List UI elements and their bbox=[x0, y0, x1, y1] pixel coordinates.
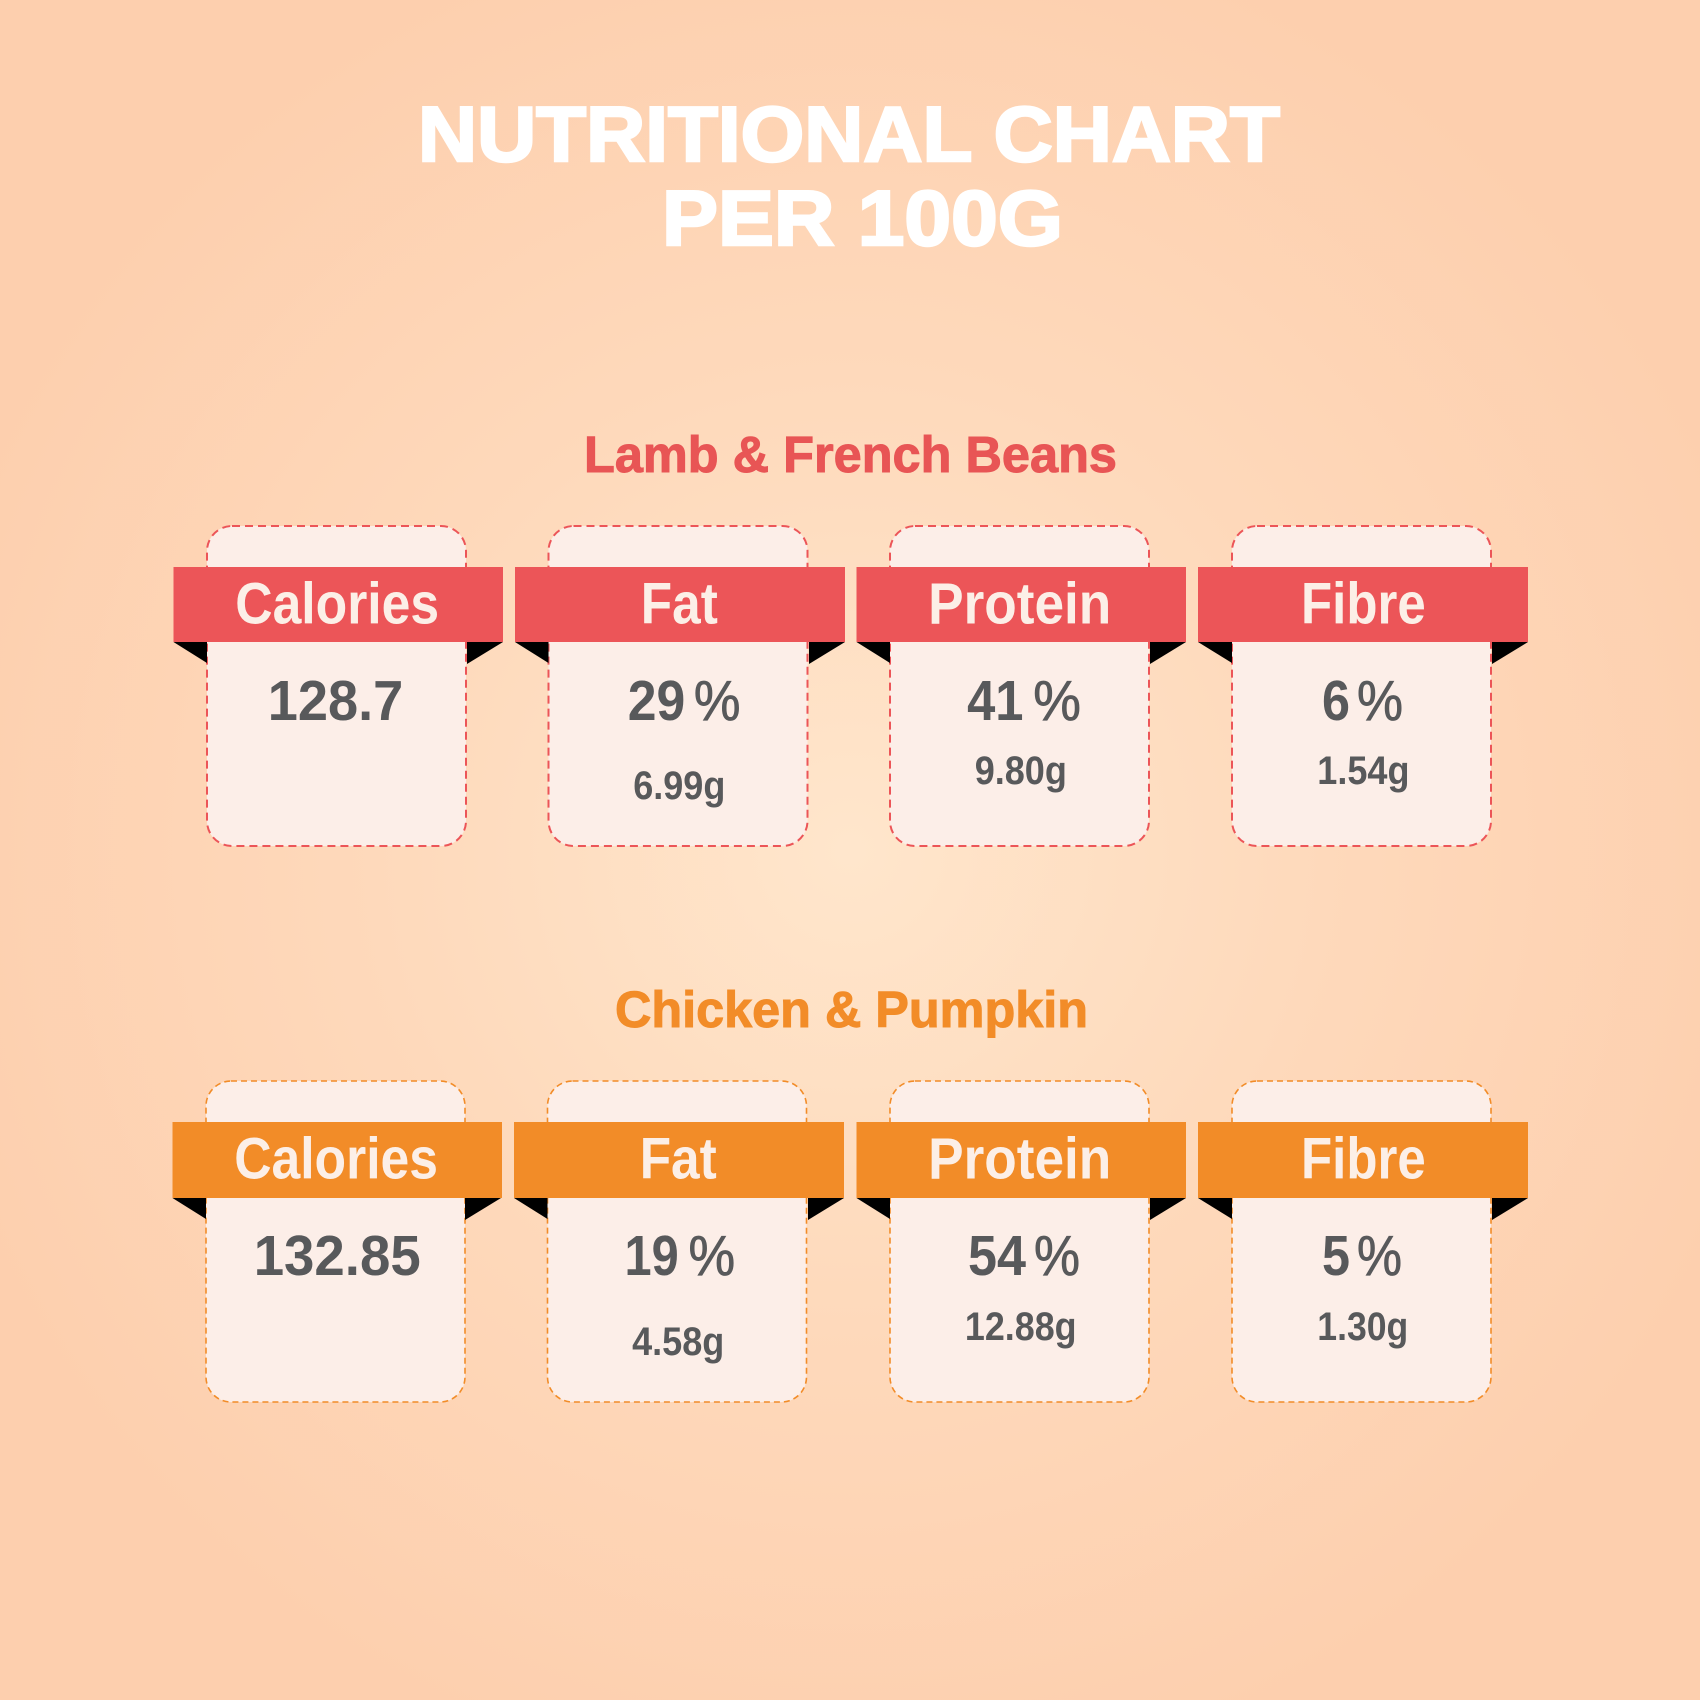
panel: Chicken Fibre bbox=[1198, 1081, 1528, 1402]
panel: Lamb Fibre bbox=[1198, 526, 1528, 846]
panel: Chicken Fat: Fat bbox=[640, 1126, 717, 1192]
panel: Chicken Calories bbox=[172, 1081, 502, 1402]
heading: Lamb & French Beans: Lamb & French Beans bbox=[584, 426, 1117, 483]
panel: Lamb Fat: Fat bbox=[641, 571, 718, 636]
panel: Chicken Fat: 4.58g bbox=[632, 1320, 724, 1364]
panel: Lamb Protein: Protein bbox=[928, 571, 1111, 636]
panel: Chicken Fibre: % bbox=[1357, 1224, 1402, 1288]
panel: Lamb Fat: 29 bbox=[628, 669, 685, 733]
panel: Chicken Fibre: 5 bbox=[1322, 1224, 1350, 1288]
panel: Lamb Protein: 41 bbox=[967, 669, 1024, 733]
panel: Lamb Protein: 9.80g bbox=[975, 749, 1067, 793]
title: PER 100G bbox=[662, 174, 1063, 262]
panel: Lamb Fibre: Fibre bbox=[1301, 571, 1426, 636]
panel: Lamb Fibre: % bbox=[1357, 669, 1403, 733]
panel: Chicken Protein: 54 bbox=[968, 1224, 1026, 1288]
panel: Chicken Calories: Calories bbox=[234, 1126, 438, 1192]
panel: Chicken Fat: 19 bbox=[624, 1224, 679, 1288]
heading: Chicken & Pumpkin: Chicken & Pumpkin bbox=[615, 981, 1088, 1038]
panel: Chicken Protein: Protein bbox=[928, 1126, 1111, 1192]
panel: Chicken Fat: % bbox=[688, 1224, 735, 1288]
panel: Chicken Fat bbox=[514, 1081, 844, 1402]
panel: Lamb Calories bbox=[174, 526, 503, 846]
panel: Lamb Protein bbox=[856, 526, 1186, 846]
panel: Lamb Fat: % bbox=[694, 669, 740, 733]
panel: Lamb Protein: % bbox=[1033, 669, 1081, 733]
panel: Chicken Protein bbox=[856, 1081, 1186, 1402]
panel: Lamb Fibre: 1.54g bbox=[1317, 749, 1410, 793]
panel: Chicken Protein: % bbox=[1034, 1224, 1080, 1288]
panel: Lamb Fibre: 6 bbox=[1322, 669, 1350, 733]
panel: Chicken Fibre: Fibre bbox=[1301, 1126, 1426, 1192]
panel: Chicken Calories: 132.85 bbox=[254, 1224, 421, 1288]
panel: Lamb Fat: 6.99g bbox=[633, 764, 725, 808]
title bbox=[418, 90, 1280, 262]
panel: Chicken Protein: 12.88g bbox=[965, 1305, 1077, 1349]
title: NUTRITIONAL CHART bbox=[418, 90, 1280, 178]
panel: Lamb Fat bbox=[515, 526, 845, 846]
panel: Chicken Fibre: 1.30g bbox=[1317, 1305, 1408, 1349]
panel: Lamb Calories: Calories bbox=[235, 571, 439, 636]
panel: Lamb Calories: 128.7 bbox=[268, 669, 403, 733]
